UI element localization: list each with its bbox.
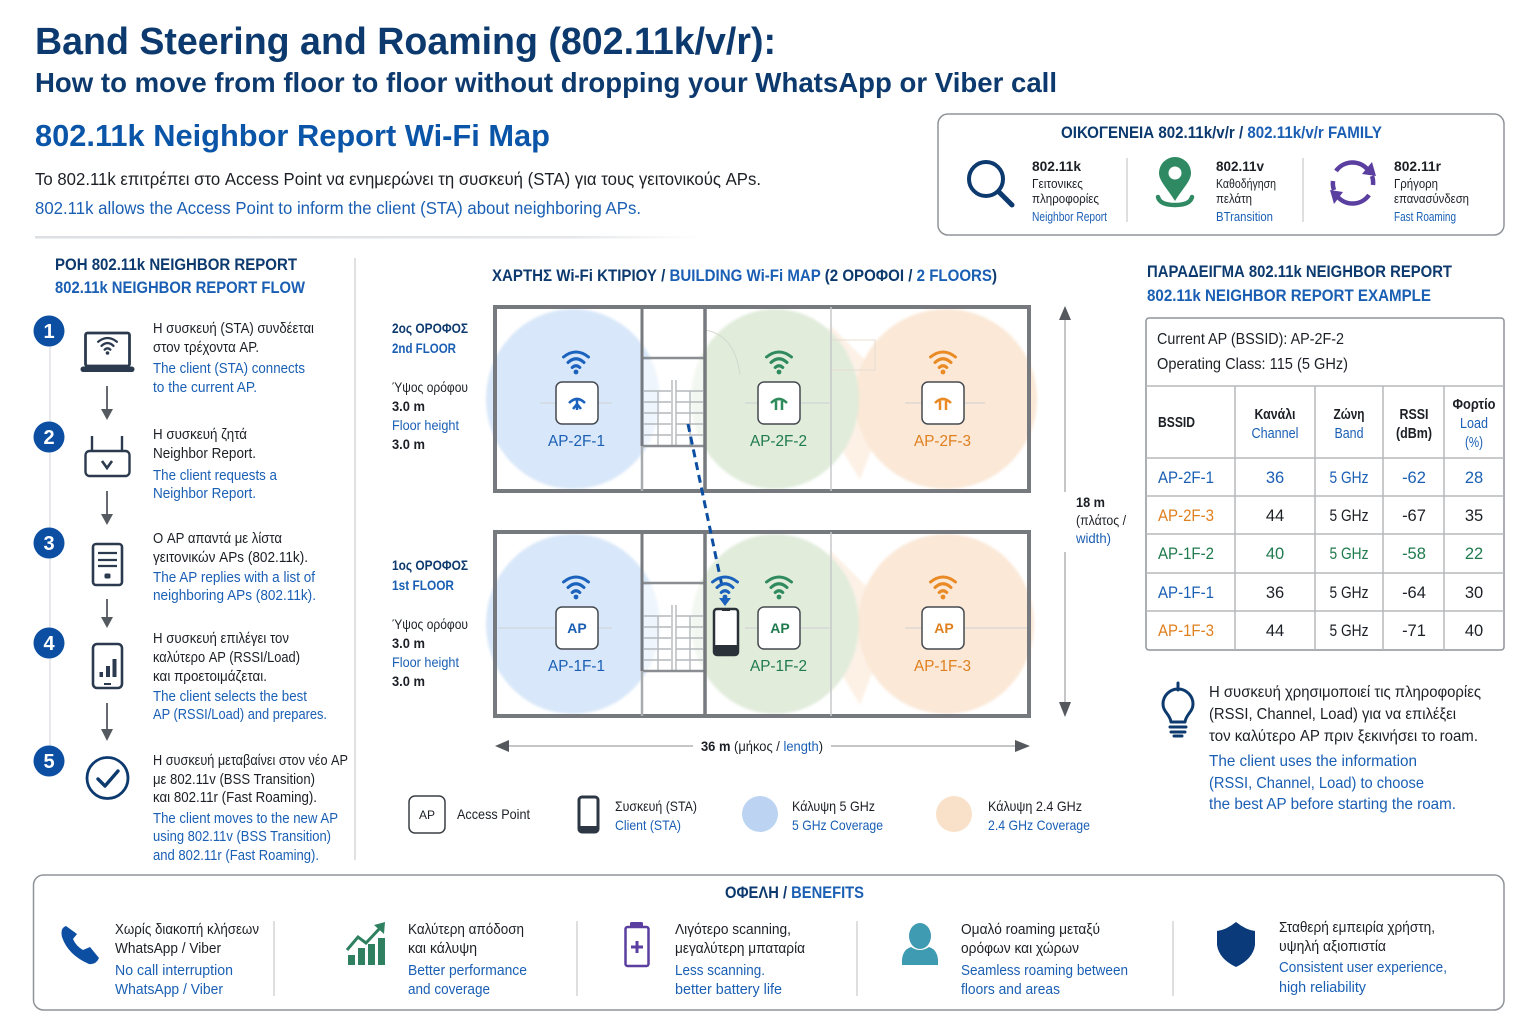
stairs	[642, 583, 705, 671]
subtitle: How to move from floor to floor without dropping your WhatsApp or Viber call	[35, 67, 1057, 98]
benefit: no call interruption: No call interruption	[115, 963, 233, 979]
arrow	[101, 703, 113, 741]
benefit: less scanning: Λιγότερο scanning,	[675, 922, 791, 938]
benefit: seamless roaming: Seamless roaming between	[961, 963, 1128, 979]
example heading: 802.11k NEIGHBOR REPORT EXAMPLE	[1147, 286, 1431, 305]
walls	[495, 307, 1029, 491]
benefit: reliability: υψηλή αξιοπιστία	[1279, 939, 1386, 955]
access point AP-1F-1: AP-1F-1	[548, 658, 605, 675]
benefit: reliability: Consistent user experience,	[1279, 960, 1447, 976]
flow heading: 802.11k NEIGHBOR REPORT FLOW	[55, 278, 306, 297]
second floor labels: Ύψος ορόφου	[392, 379, 468, 395]
legend: client	[579, 797, 697, 833]
legend: client: Συσκευή (STA)	[615, 798, 697, 814]
access point AP-1F-1: AP	[567, 620, 587, 636]
table row AP-1F-1: 5 GHz	[1330, 584, 1368, 602]
first floor labels: 1st FLOOR	[392, 577, 454, 593]
second floor labels: Floor height	[392, 417, 459, 433]
table row AP-2F-1: -62	[1402, 469, 1426, 487]
legend: 5 GHz coverage: Κάλυψη 5 GHz	[792, 798, 875, 814]
802.11v text: BTransition	[1216, 210, 1273, 224]
access point AP-1F-3	[914, 577, 971, 675]
access point AP-1F-1	[548, 577, 605, 675]
dimension: length 36 m	[495, 738, 1030, 754]
step 5: Η συσκευή μεταβαίνει στον νέο AP	[153, 753, 348, 769]
legend: 5 GHz coverage	[742, 796, 883, 833]
table row AP-1F-1: AP-1F-1	[1158, 584, 1214, 602]
access point AP-2F-2: AP-2F-2	[750, 433, 807, 450]
table row AP-1F-3: AP-1F-3	[1158, 622, 1214, 640]
access point AP-2F-3: AP-2F-3	[914, 433, 971, 450]
legend: access point: AP	[419, 808, 435, 822]
floor plan: second floor	[486, 307, 1037, 491]
table header: (dBm)	[1396, 425, 1432, 442]
legend: 2.4 GHz coverage	[936, 796, 1090, 833]
table row AP-1F-1: 36	[1266, 584, 1284, 602]
callout text: the best AP before starting the roam.	[1209, 796, 1456, 813]
second floor labels: 3.0 m	[392, 398, 425, 414]
802.11v text	[1216, 158, 1276, 224]
access point AP-1F-3: AP-1F-3	[914, 658, 971, 675]
first floor labels: Floor height	[392, 654, 459, 670]
table header: Φορτίο	[1452, 396, 1496, 413]
dimension: width 18 m: 18 m	[1076, 494, 1105, 510]
step 2: Η συσκευή ζητά	[153, 427, 247, 443]
step 4: The client selects the best	[153, 689, 307, 705]
table row AP-1F-1	[1158, 584, 1483, 602]
family heading: ΟΙΚΟΓΕΝΕΙΑ 802.11k/v/r / 802.11k/v/r FAMILY	[1061, 124, 1382, 142]
benefit: seamless roaming: ορόφων και χώρων	[961, 941, 1079, 957]
dimension: width 18 m	[1059, 306, 1126, 717]
step 3	[34, 528, 316, 604]
second floor labels: 2nd FLOOR	[392, 340, 456, 356]
benefit: reliability: Σταθερή εμπειρία χρήστη,	[1279, 920, 1435, 936]
step 2: 2	[43, 427, 55, 449]
benefit: reliability	[1217, 920, 1447, 996]
table row AP-2F-3: -67	[1402, 507, 1426, 525]
stairs	[642, 358, 705, 446]
access point AP-1F-2: AP	[770, 620, 790, 636]
802.11k text: πληροφορίες	[1032, 192, 1099, 206]
step 5: 5	[43, 751, 55, 773]
benefit: reliability: high reliability	[1279, 980, 1367, 996]
coverage circles	[486, 309, 1037, 489]
table row AP-1F-2: 22	[1465, 545, 1483, 563]
table row AP-2F-3: 5 GHz	[1330, 507, 1368, 525]
panel: building wi-fi map	[392, 266, 1126, 833]
table header	[1158, 396, 1496, 451]
table	[1146, 318, 1504, 650]
benefit: no call interruption	[62, 922, 259, 998]
second floor labels: 2ος ΟΡΟΦΟΣ	[392, 320, 468, 336]
step 4: καλύτερο AP (RSSI/Load)	[153, 650, 300, 666]
callout	[1163, 683, 1481, 813]
table row AP-1F-2: 5 GHz	[1330, 545, 1368, 563]
table row AP-2F-3: 44	[1266, 507, 1284, 525]
callout text	[1209, 684, 1481, 813]
callout text: The client uses the information	[1209, 753, 1417, 770]
floor plan: first floor	[486, 532, 1034, 716]
table row AP-1F-3	[1158, 622, 1483, 640]
table header: BSSID	[1158, 414, 1195, 431]
intro text: Το 802.11k επιτρέπει στο Access Point να ενημερώνει τη συσκευή (STA) για τους γειτονικούς APs.	[35, 169, 761, 189]
table row AP-2F-1: 5 GHz	[1330, 469, 1368, 487]
step 3: neighboring APs (802.11k).	[153, 588, 316, 604]
access point AP-1F-2	[750, 577, 807, 675]
panel: 802.11k/v/r family	[938, 114, 1504, 235]
benefit: better performance: Καλύτερη απόδοση	[408, 922, 524, 938]
table header: Channel	[1252, 425, 1298, 442]
benefit: less scanning: better battery life	[675, 982, 782, 998]
table row AP-1F-1: 30	[1465, 584, 1483, 602]
step 2: Neighbor Report.	[153, 486, 256, 502]
802.11r text	[1394, 158, 1469, 224]
step 3: Ο AP απαντά με λίστα	[153, 531, 282, 547]
802.11k text: Γειτονικες	[1032, 177, 1083, 191]
step 1: to the current AP.	[153, 380, 257, 396]
icon: magnifier	[969, 162, 1012, 205]
example heading: ΠΑΡΑΔΕΙΓΜΑ 802.11k NEIGHBOR REPORT	[1147, 262, 1453, 281]
802.11k text: Neighbor Report	[1032, 210, 1107, 224]
first floor labels: 3.0 m	[392, 635, 425, 651]
benefit: seamless roaming: floors and areas	[961, 982, 1060, 998]
icon: location pin	[1158, 157, 1192, 205]
icon: light bulb	[1163, 683, 1193, 736]
first floor labels: 1ος ΟΡΟΦΟΣ	[392, 557, 468, 573]
legend: 2.4 GHz coverage: Κάλυψη 2.4 GHz	[988, 798, 1082, 814]
step 1: The client (STA) connects	[153, 361, 305, 377]
table row AP-1F-2: AP-1F-2	[1158, 545, 1214, 563]
intro text	[35, 169, 761, 218]
arrow	[101, 599, 113, 628]
benefit: seamless roaming: Ομαλό roaming μεταξύ	[961, 922, 1100, 938]
table row AP-2F-3: 35	[1465, 507, 1483, 525]
step 1: Η συσκευή (STA) συνδέεται	[153, 321, 314, 337]
access point AP-1F-3: AP	[934, 620, 954, 636]
legend: access point: Access Point	[457, 806, 530, 822]
coverage circles	[486, 534, 1034, 714]
panel: benefits	[34, 875, 1504, 1010]
benefit: better performance: and coverage	[408, 982, 490, 998]
title: Band Steering and Roaming (802.11k/v/r):	[35, 21, 776, 63]
legend: 5 GHz coverage: 5 GHz Coverage	[792, 817, 883, 833]
icon: sync arrows	[1330, 162, 1376, 204]
dimension: width 18 m: (πλάτος /	[1076, 512, 1126, 528]
benefit: better performance: και κάλυψη	[408, 941, 477, 957]
step 5: using 802.11v (BSS Transition)	[153, 829, 331, 845]
access point AP-2F-1: AP-2F-1	[548, 433, 605, 450]
table summary: Current AP (BSSID): AP-2F-2	[1157, 331, 1344, 348]
step 4: και προετοιμάζεται.	[153, 669, 267, 685]
access point AP-2F-3	[914, 352, 971, 450]
table header: Load	[1460, 415, 1488, 432]
step 5: The client moves to the new AP	[153, 811, 338, 827]
section heading: neighbor report map: 802.11k Neighbor Report Wi-Fi Map	[35, 118, 550, 153]
table header: (%)	[1465, 434, 1483, 451]
benefit: no call interruption: WhatsApp / Viber	[115, 941, 221, 957]
walls	[495, 532, 1029, 716]
table row AP-1F-2	[1158, 545, 1483, 563]
step 3: The AP replies with a list of	[153, 570, 316, 586]
step 5: με 802.11v (BSS Transition)	[153, 772, 315, 788]
benefit: less scanning	[626, 922, 805, 998]
benefit: less scanning: μεγαλύτερη μπαταρία	[675, 941, 805, 957]
access point AP-2F-2	[750, 352, 807, 450]
flow heading: ΡΟΗ 802.11k NEIGHBOR REPORT	[55, 255, 298, 274]
callout text: τον καλύτερο AP πριν ξεκινήσει το roam.	[1209, 728, 1478, 745]
step 5: και 802.11r (Fast Roaming).	[153, 790, 317, 806]
benefit: better performance	[347, 922, 527, 998]
panel: neighbor report flow	[34, 255, 355, 864]
intro text: 802.11k allows the Access Point to inform the client (STA) about neighboring APs.	[35, 198, 641, 218]
table summary	[1157, 331, 1348, 373]
802.11v text: πελάτη	[1216, 192, 1252, 206]
step 5: and 802.11r (Fast Roaming).	[153, 848, 319, 864]
legend	[409, 796, 1090, 833]
step 1: στον τρέχοντα AP.	[153, 340, 259, 356]
second floor labels: 3.0 m	[392, 436, 425, 452]
first floor labels	[392, 557, 468, 689]
table row AP-1F-1: -64	[1402, 584, 1426, 602]
step 4	[34, 628, 327, 723]
arrow	[101, 491, 113, 525]
step 2: The client requests a	[153, 468, 278, 484]
table row AP-1F-3: 40	[1465, 622, 1483, 640]
step 4: Η συσκευή επιλέγει τον	[153, 631, 289, 647]
panel: neighbor report example	[1146, 262, 1504, 813]
table row AP-2F-1	[1158, 469, 1483, 487]
802.11r text: Fast Roaming	[1394, 210, 1456, 224]
step 5	[34, 746, 348, 864]
callout text: Η συσκευή χρησιμοποιεί τις πληροφορίες	[1209, 684, 1481, 701]
802.11r text: 802.11r	[1394, 158, 1442, 174]
legend: 2.4 GHz coverage: 2.4 GHz Coverage	[988, 817, 1090, 833]
table row AP-2F-3: AP-2F-3	[1158, 507, 1214, 525]
table row AP-2F-1: 28	[1465, 469, 1483, 487]
second floor labels	[392, 320, 468, 452]
benefit: seamless roaming	[902, 922, 1128, 998]
802.11k text	[1032, 158, 1107, 224]
flow heading	[55, 255, 306, 297]
dimension: width 18 m: width)	[1075, 530, 1111, 546]
step 4: AP (RSSI/Load) and prepares.	[153, 707, 327, 723]
table row AP-2F-1: 36	[1266, 469, 1284, 487]
table row AP-2F-1: AP-2F-1	[1158, 469, 1214, 487]
step 2	[34, 422, 278, 502]
table row AP-1F-3: 44	[1266, 622, 1284, 640]
callout text: (RSSI, Channel, Load) to choose	[1209, 775, 1424, 792]
first floor labels: Ύψος ορόφου	[392, 616, 468, 632]
table row AP-1F-3: -71	[1402, 622, 1426, 640]
table header: RSSI	[1400, 406, 1428, 423]
access point AP-1F-2: AP-1F-2	[750, 658, 807, 675]
map heading: ΧΑΡΤΗΣ Wi-Fi ΚΤΙΡΙΟΥ / BUILDING Wi-Fi MAP (2 ΟΡΟΦΟΙ / 2 FLOORS)	[492, 266, 997, 285]
client device on first floor	[712, 577, 738, 655]
step 4: 4	[43, 633, 55, 655]
802.11v text: 802.11v	[1216, 158, 1264, 174]
first floor labels: 3.0 m	[392, 673, 425, 689]
legend: access point	[409, 796, 530, 833]
callout text: (RSSI, Channel, Load) για να επιλέξει	[1209, 706, 1456, 723]
step 3: γειτονικών APs (802.11k).	[153, 550, 308, 566]
table header: Ζώνη	[1334, 406, 1364, 423]
benefit: less scanning: Less scanning.	[675, 963, 765, 979]
802.11v text: Καθοδήγηση	[1216, 177, 1276, 191]
table row AP-1F-2: -58	[1402, 545, 1426, 563]
step 3: 3	[43, 533, 55, 555]
legend: client: Client (STA)	[615, 817, 681, 833]
roaming path: dashed arrow	[688, 424, 722, 586]
table row AP-2F-3	[1158, 507, 1483, 525]
step 1	[34, 316, 314, 396]
table summary: Operating Class: 115 (5 GHz)	[1157, 356, 1348, 373]
table row AP-1F-2: 40	[1266, 545, 1284, 563]
benefit: better performance: Better performance	[408, 963, 527, 979]
arrow	[101, 386, 113, 420]
benefits heading: ΟΦΕΛΗ / BENEFITS	[725, 884, 864, 902]
step 1: 1	[43, 321, 55, 343]
table row AP-1F-3: 5 GHz	[1330, 622, 1368, 640]
access point AP-2F-1	[548, 352, 605, 450]
802.11r text: επανασύνδεση	[1394, 192, 1469, 206]
benefit: no call interruption: WhatsApp / Viber	[115, 982, 223, 998]
table header: Band	[1334, 425, 1364, 442]
802.11k text: 802.11k	[1032, 158, 1081, 174]
802.11r text: Γρήγορη	[1394, 177, 1438, 191]
example heading	[1147, 262, 1453, 305]
table header: Κανάλι	[1254, 406, 1296, 423]
benefit: no call interruption: Χωρίς διακοπή κλήσεων	[115, 922, 259, 938]
step 2: Neighbor Report.	[153, 446, 256, 462]
dimension: length 36 m: 36 m (μήκος / length)	[701, 738, 823, 754]
